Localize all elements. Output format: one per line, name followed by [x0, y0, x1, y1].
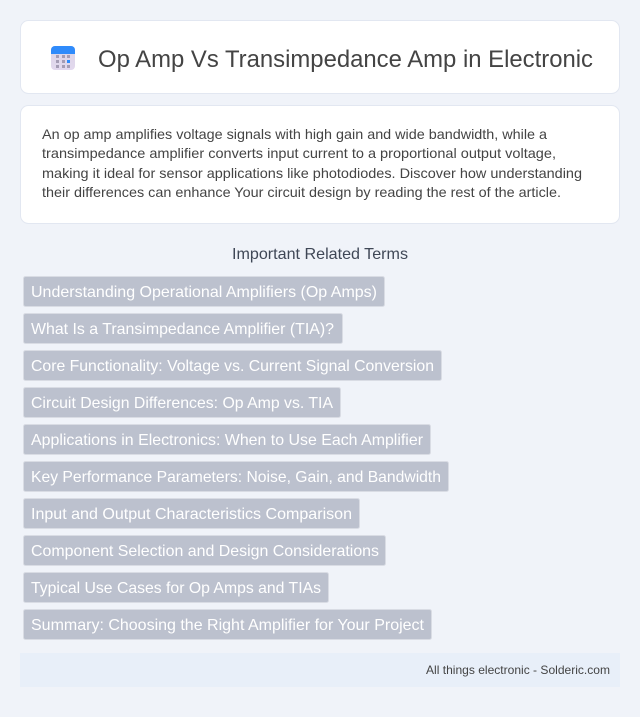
tag 5: Applications in Electronics: When to Use Each Amplifier — [31, 432, 424, 449]
footer credit: All things electronic - Solderic.com — [426, 663, 610, 677]
tag 1: Understanding Operational Amplifiers (Op Amps) — [31, 284, 377, 301]
panel: description — [20, 106, 620, 224]
tag 10: Summary: Choosing the Right Amplifier for Your Project — [31, 617, 425, 634]
tag 3: Core Functionality: Voltage vs. Current Signal Conversion — [31, 358, 434, 375]
tag 7: Input and Output Characteristics Comparison — [31, 506, 352, 523]
tag 4 — [24, 388, 340, 418]
heading: related terms: Important Related Terms — [232, 246, 408, 263]
tag 6 — [24, 462, 448, 492]
text block: description — [42, 126, 582, 200]
panel: header — [20, 20, 620, 94]
tag 8: Component Selection and Design Considerations — [31, 543, 379, 560]
tag 8 — [24, 536, 386, 566]
text block: description: An op amp amplifies voltage signals with high gain and wide bandwidth, while a — [42, 126, 547, 142]
text block: description: their differences can enhance Your circuit design by reading the rest of the article. — [42, 184, 561, 200]
title: Op Amp Vs Transimpedance Amp in Electronic — [98, 46, 593, 73]
tag 2 — [24, 314, 342, 344]
tag 3 — [24, 350, 442, 380]
tag 6: Key Performance Parameters: Noise, Gain, and Bandwidth — [31, 469, 441, 486]
tag 2: What Is a Transimpedance Amplifier (TIA)? — [31, 321, 334, 338]
tag 4: Circuit Design Differences: Op Amp vs. TIA — [31, 395, 333, 412]
tag 9 — [24, 572, 328, 602]
tag 5 — [24, 424, 430, 454]
tag 7 — [24, 498, 360, 528]
footer — [20, 653, 620, 687]
tag 10 — [24, 610, 432, 640]
list: related terms tags — [24, 276, 448, 640]
icon: calendar grid — [51, 46, 75, 70]
tag 1 — [24, 276, 384, 306]
tag 9: Typical Use Cases for Op Amps and TIAs — [31, 580, 321, 597]
text block: description: making it ideal for sensor applications like photodiodes. Discover how understanding — [42, 165, 582, 181]
text block: description: transimpedance amplifier converts input current to a proportional output voltage, — [42, 145, 556, 161]
